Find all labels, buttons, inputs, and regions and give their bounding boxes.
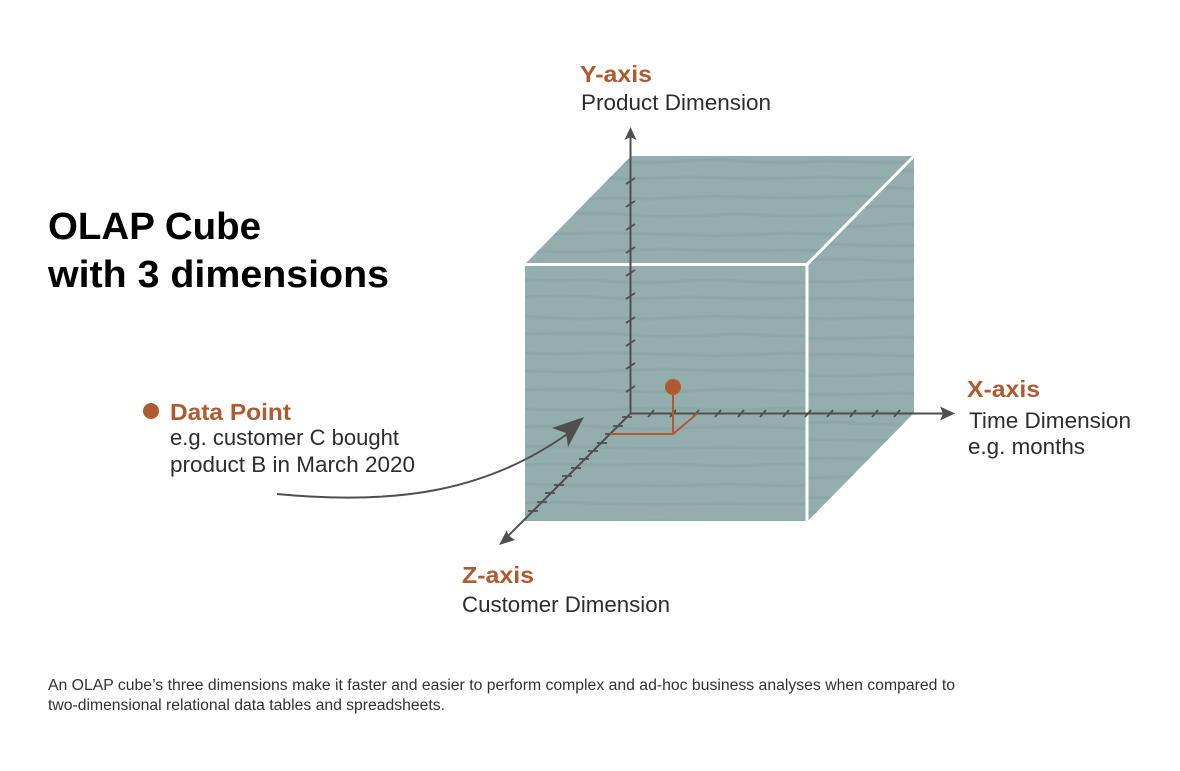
X axis with ticks [630,406,955,420]
footnote [48,677,955,714]
data point legend: e.g. customer C bought [170,425,399,450]
data point legend: product B in March 2020 [170,452,415,477]
Z axis with ticks [499,414,632,545]
Y axis with ticks [624,127,636,414]
OLAP cube [525,156,914,521]
data point legend: Data Point [170,399,291,425]
title [47,206,389,296]
Y-axis label [580,61,771,115]
data point guides and marker [610,379,698,434]
cube top face [526,156,912,263]
curved pointer arrow [277,417,584,498]
title: with 3 dimensions [47,254,389,296]
X-axis label: X-axis [967,376,1040,402]
Z-axis label: Customer Dimension [462,592,670,617]
Y-axis label: Product Dimension [581,90,771,115]
cube right face [808,158,914,520]
X-axis label [967,376,1131,459]
data point legend [143,399,415,477]
footnote: An OLAP cube’s three dimensions make it faster and easier to perform complex and ad-hoc business analyses when compared to [48,677,955,694]
cube front face [525,266,806,521]
title: OLAP Cube [48,206,261,248]
X-axis label: Time Dimension [969,408,1131,433]
cube white edges [525,156,914,521]
Z-axis label [462,562,670,617]
footnote: two-dimensional relational data tables and spreadsheets. [48,697,445,714]
Z-axis label: Z-axis [462,562,534,588]
X-axis label: e.g. months [968,434,1085,459]
Y-axis label: Y-axis [580,61,652,87]
